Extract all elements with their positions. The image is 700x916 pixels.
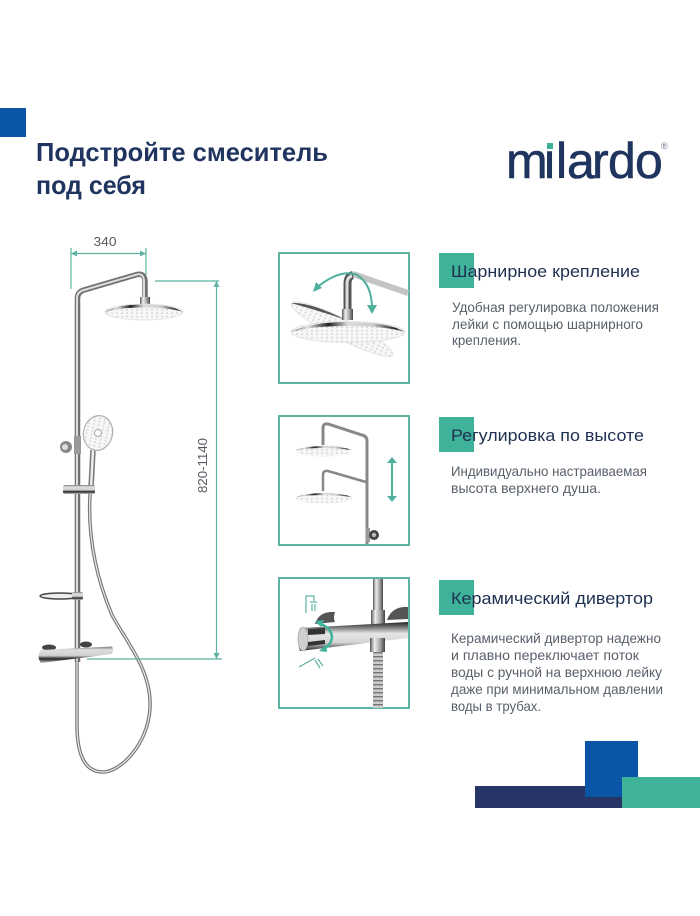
text: swivel mount: крепления. xyxy=(452,332,521,348)
heading: height adjustment: Регулировка по высоте xyxy=(451,426,644,445)
full shower set illustration xyxy=(38,274,183,772)
text: swivel mount xyxy=(452,299,659,348)
text: swivel mount: лейки с помощью шарнирного xyxy=(452,316,643,332)
text: ceramic diverter: Керамический дивертор надежно xyxy=(451,630,661,646)
rotation arrow xyxy=(313,273,377,314)
lower arm xyxy=(323,471,366,491)
icon: overhead shower xyxy=(306,596,317,613)
text: height adjustment: высота верхнего душа. xyxy=(451,480,601,496)
panel: ceramic diverter xyxy=(279,578,409,708)
lower head xyxy=(296,492,352,504)
text: swivel mount: Удобная регулировка положения xyxy=(452,299,659,315)
hose xyxy=(373,650,383,708)
up-down arrow xyxy=(387,457,397,502)
dimension: height 820-1140: 820-1140 xyxy=(195,438,210,493)
neck xyxy=(348,275,353,317)
rail and arm xyxy=(78,274,145,662)
text: ceramic diverter: даже при минимальном давлении xyxy=(451,681,663,697)
rotation ring xyxy=(318,623,332,650)
text: height adjustment: Индивидуально настраиваемая xyxy=(451,463,647,479)
hand shower xyxy=(80,413,116,488)
dark groove on cap xyxy=(308,628,325,646)
title: под себя xyxy=(36,170,146,200)
dimension: width 340: 340 xyxy=(94,234,116,249)
hose xyxy=(77,494,150,772)
wall knob xyxy=(366,528,379,542)
rail and upper arm xyxy=(323,424,367,544)
heading: swivel mount xyxy=(439,253,640,288)
vertical pipe xyxy=(373,579,383,623)
decorative corner blocks xyxy=(475,741,700,808)
title xyxy=(36,137,328,200)
text: ceramic diverter: воды в трубах. xyxy=(451,698,541,714)
heading: ceramic diverter: Керамический дивертор xyxy=(451,589,653,608)
panel: height adjustment xyxy=(279,416,409,545)
text: ceramic diverter xyxy=(451,630,663,714)
dimension: height 820-1140 xyxy=(87,281,222,659)
panel: swivel mount xyxy=(279,253,409,383)
soap dish xyxy=(40,592,83,600)
overhead shower head xyxy=(105,297,183,320)
text: ceramic diverter: воды с ручной на верхнюю лейку xyxy=(451,664,662,680)
dimension: width 340 xyxy=(71,234,146,289)
shower head xyxy=(291,322,405,342)
hose fitting xyxy=(370,638,385,652)
heading: ceramic diverter xyxy=(439,580,653,615)
text: ceramic diverter: и плавно переключает поток xyxy=(451,647,640,663)
upper head xyxy=(296,446,352,456)
heading: height adjustment xyxy=(439,417,644,452)
text: height adjustment xyxy=(451,463,647,496)
wall knob xyxy=(60,436,81,454)
mixer body xyxy=(298,622,408,651)
title: Подстройте смеситель xyxy=(36,137,328,167)
logo: milardo: ® xyxy=(661,141,668,151)
end cap xyxy=(298,627,308,651)
hose highlight xyxy=(77,494,150,772)
domes xyxy=(315,607,408,624)
slider bracket xyxy=(63,485,95,494)
heading: swivel mount: Шарнирное крепление xyxy=(451,262,640,281)
logo: milardo: milardo xyxy=(506,133,663,189)
tilted shower head xyxy=(287,294,397,364)
arm pipe xyxy=(353,274,408,293)
pipe collar xyxy=(371,610,385,624)
thermostat mixer xyxy=(38,642,113,663)
corner accent square xyxy=(0,108,26,137)
icon: hand shower xyxy=(299,658,323,668)
